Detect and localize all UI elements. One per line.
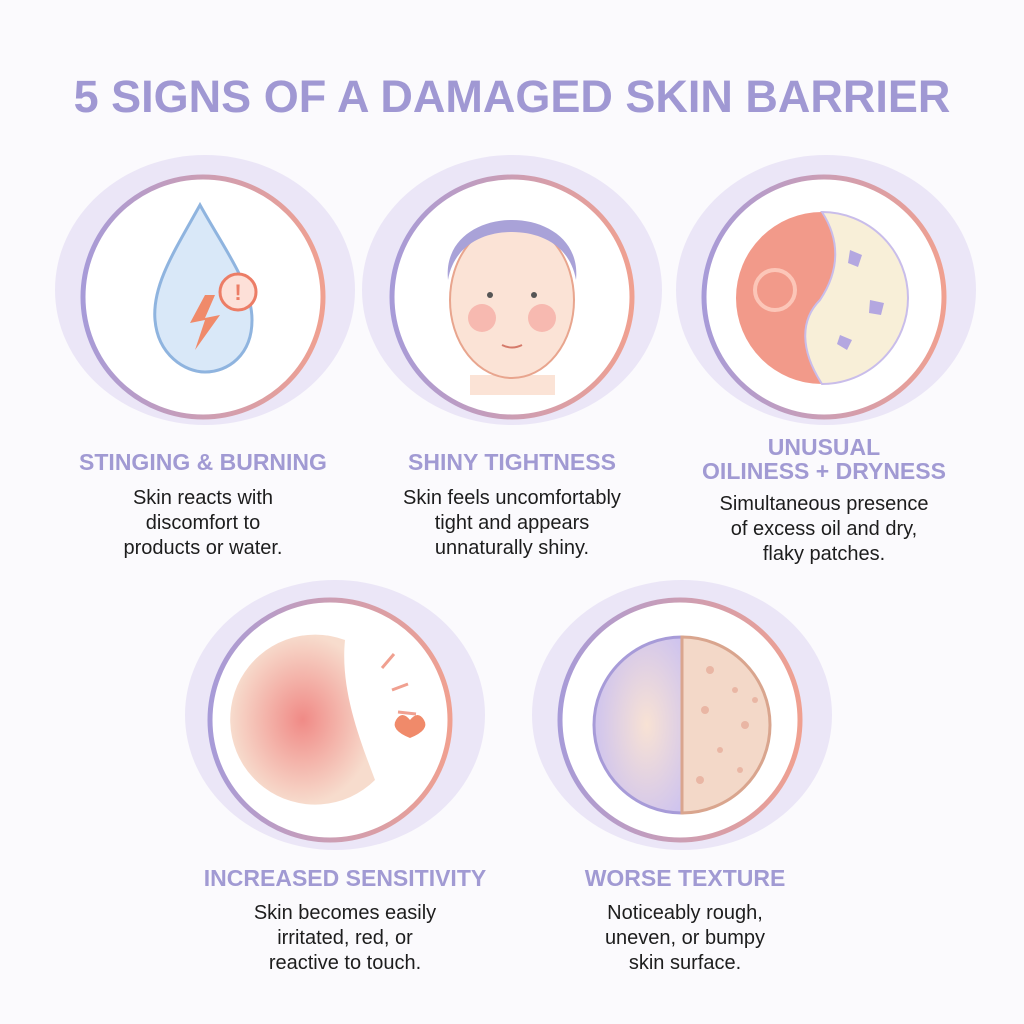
icon: water drop: ! bbox=[234, 280, 242, 305]
icon: smooth vs rough bbox=[594, 637, 770, 813]
panel: sensitivity bbox=[185, 580, 486, 974]
heading: OILINESS + DRYNESS bbox=[702, 458, 946, 484]
text: Noticeably rough, bbox=[607, 902, 763, 924]
text: tight and appears bbox=[435, 512, 589, 534]
text: Skin reacts with bbox=[133, 487, 273, 509]
panel: texture bbox=[532, 580, 832, 974]
text: skin surface. bbox=[629, 952, 741, 974]
text: flaky patches. bbox=[763, 543, 885, 565]
panel: stinging bbox=[55, 155, 355, 559]
heading: UNUSUAL bbox=[768, 434, 880, 460]
panel: shiny tightness bbox=[362, 155, 662, 559]
icon: face bbox=[448, 220, 576, 395]
text: unnaturally shiny. bbox=[435, 537, 589, 559]
heading: SHINY TIGHTNESS bbox=[408, 449, 616, 475]
text: of excess oil and dry, bbox=[731, 518, 917, 540]
text: Skin becomes easily bbox=[254, 902, 436, 924]
icon: irritated skin bbox=[230, 635, 425, 805]
text: uneven, or bumpy bbox=[605, 927, 765, 949]
text: Skin feels uncomfortably bbox=[403, 487, 621, 509]
text: reactive to touch. bbox=[269, 952, 421, 974]
heading: INCREASED SENSITIVITY bbox=[204, 865, 486, 891]
text: Simultaneous presence bbox=[719, 493, 929, 515]
heading: STINGING & BURNING bbox=[79, 449, 327, 475]
icon: yin yang skin bbox=[736, 212, 908, 384]
title: 5 SIGNS OF A DAMAGED SKIN BARRIER bbox=[74, 71, 950, 122]
text: discomfort to bbox=[146, 512, 260, 534]
panel: oiliness dryness bbox=[676, 155, 976, 565]
text: irritated, red, or bbox=[277, 927, 413, 949]
heading: WORSE TEXTURE bbox=[585, 865, 785, 891]
icon: water drop bbox=[155, 205, 256, 372]
text: products or water. bbox=[124, 537, 282, 559]
